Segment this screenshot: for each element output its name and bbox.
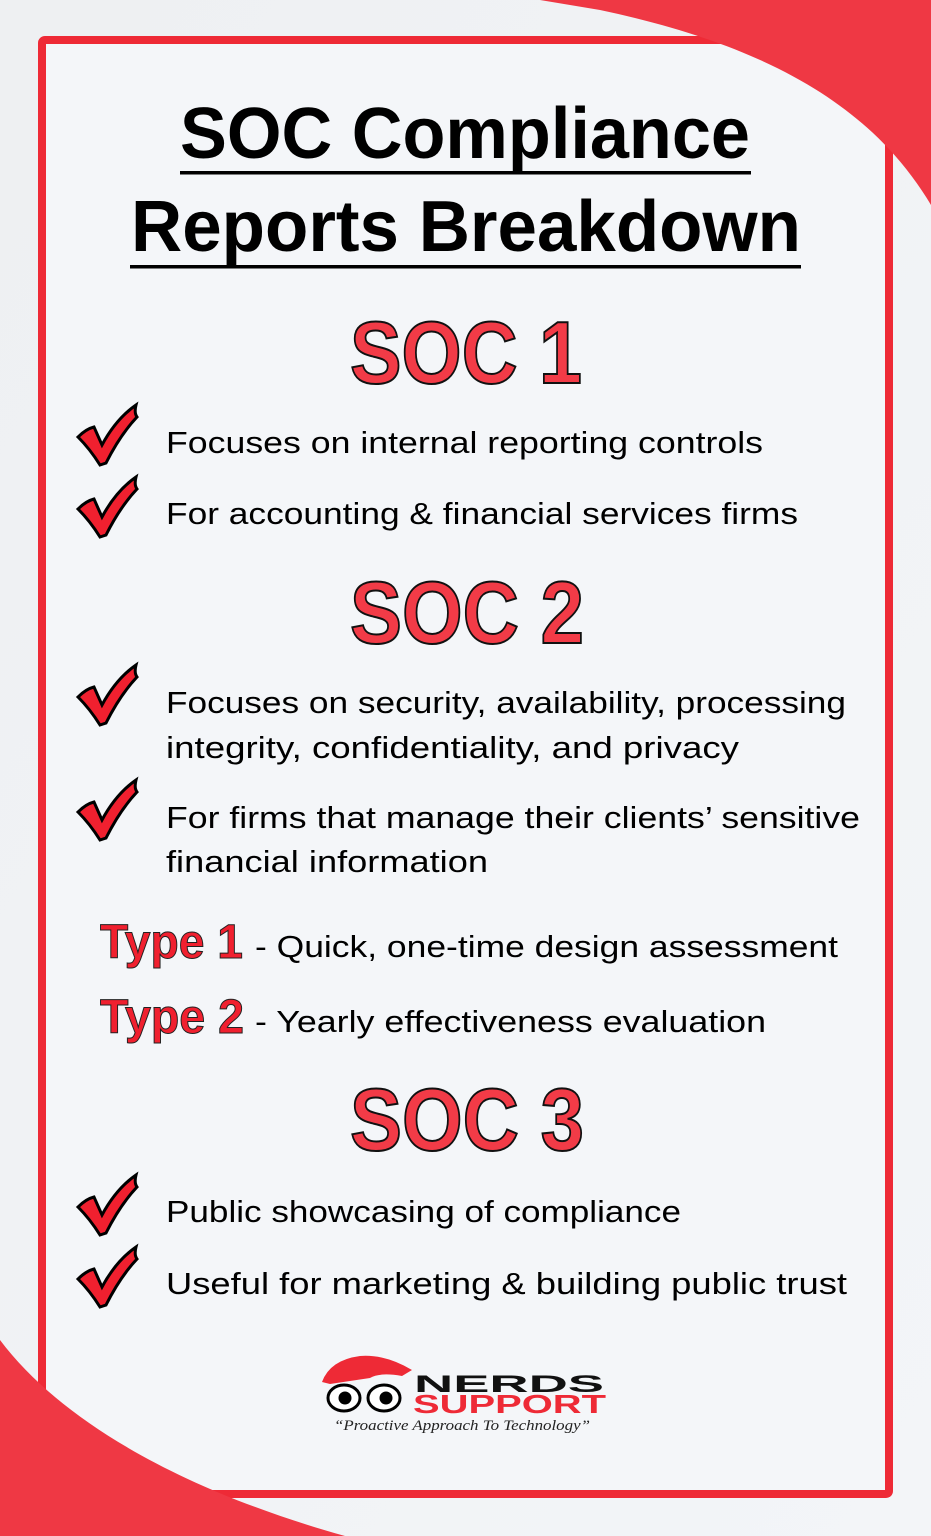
- title: [130, 94, 801, 268]
- heading: SOC 1: SOC 1: [350, 303, 582, 402]
- decoration: bottom-left red curve: [0, 1340, 345, 1536]
- icon: hair: [322, 1356, 412, 1384]
- icon: check: [78, 405, 137, 465]
- title: SOC Compliance: [180, 94, 750, 174]
- text: bullet 4: For firms that manage their clients’ sensitive: [166, 800, 860, 835]
- text: type 1: [100, 916, 838, 969]
- logo: [322, 1356, 606, 1434]
- text: bullet 4: financial information: [166, 844, 488, 879]
- text: type 2: Type 2: [100, 991, 244, 1044]
- text: bullet 1: Focuses on internal reporting controls: [166, 425, 763, 460]
- text: type 2: - Yearly effectiveness evaluation: [255, 1004, 766, 1039]
- text: bullet 3: [166, 685, 846, 765]
- text: type 2: [100, 991, 766, 1044]
- icon: check: [78, 780, 137, 840]
- icon: check: [78, 665, 137, 725]
- icon: check: [78, 477, 137, 537]
- text: bullet 5: Public showcasing of compliance: [166, 1194, 681, 1229]
- title: Reports Breakdown: [131, 187, 801, 267]
- heading: SOC 2: SOC 2: [350, 563, 584, 662]
- heading: SOC 3: SOC 3: [350, 1070, 584, 1169]
- text: type 1: - Quick, one-time design assessment: [255, 929, 838, 964]
- logo: NERDS: [414, 1371, 604, 1398]
- logo: SUPPORT: [413, 1389, 606, 1419]
- decoration: top-right red curve: [540, 0, 931, 205]
- icon: glasses: [328, 1385, 400, 1411]
- text: bullet 6: Useful for marketing & building public trust: [166, 1266, 847, 1301]
- icon: check: [78, 1247, 137, 1307]
- icon: check: [78, 1175, 137, 1235]
- text: bullet 4: [166, 800, 860, 879]
- logo: “Proactive Approach To Technology”: [334, 1418, 590, 1434]
- text: bullet 3: integrity, confidentiality, and privacy: [166, 730, 740, 765]
- text: type 1: Type 1: [100, 916, 243, 969]
- text: bullet 2: For accounting & financial services firms: [166, 496, 798, 531]
- text: bullet 3: Focuses on security, availability, processing: [166, 685, 846, 720]
